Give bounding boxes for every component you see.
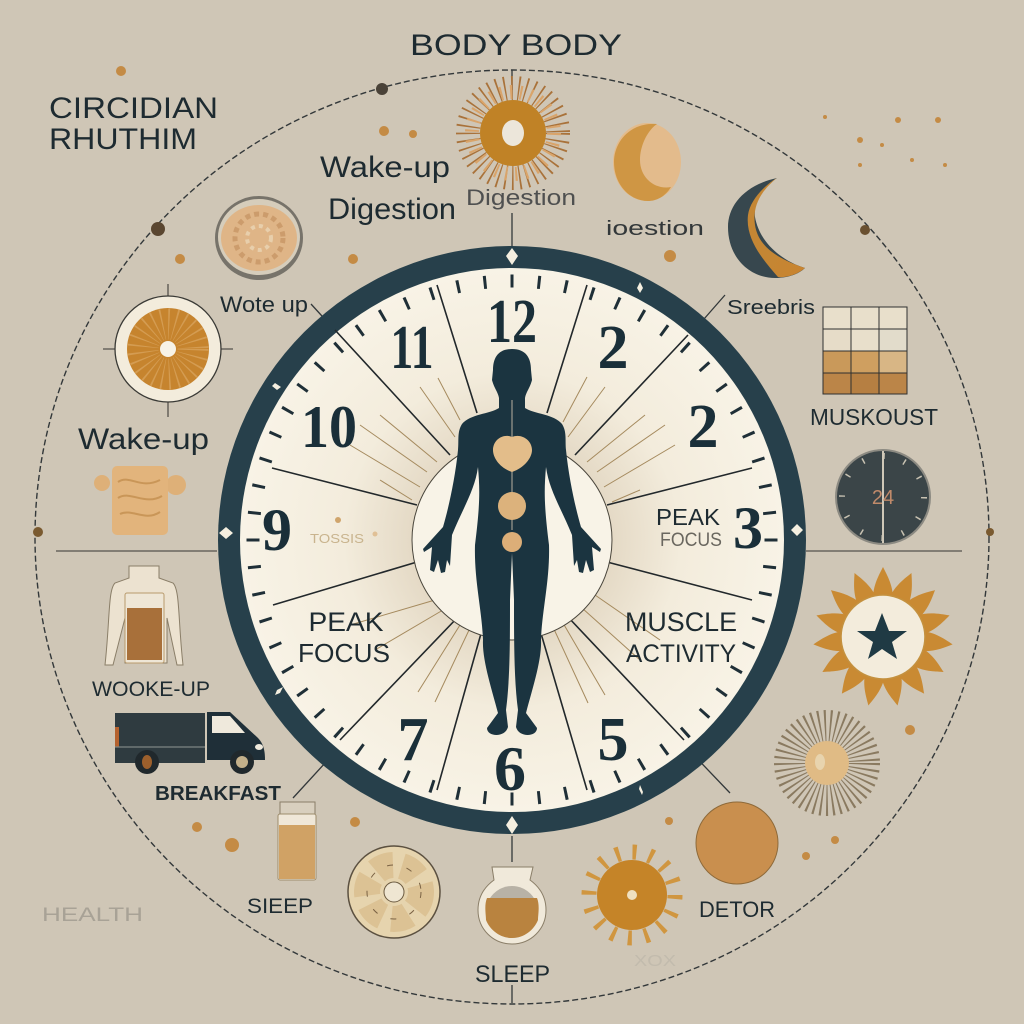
label: breakfast: BREAKFAST (155, 783, 281, 805)
icon: wall clock (836, 450, 930, 544)
clock radial lines (272, 285, 752, 790)
decorative dots (116, 66, 947, 860)
icon: seed slice (348, 846, 440, 938)
label: wake-up: Wake-up (78, 423, 209, 456)
text: wake-up digestion (320, 151, 456, 226)
clock labels: PEAK (308, 607, 384, 637)
clock labels: PEAK (656, 504, 721, 530)
text: wake-up digestion: Digestion (328, 193, 456, 226)
clock numerals: 2 (598, 314, 628, 382)
text: digestion small: Digestion (466, 185, 576, 210)
icon: orange disc (696, 802, 778, 884)
label: sleep: SLEEP (475, 961, 550, 988)
title: BODY BODY (410, 29, 622, 62)
icon: citrus wheel (103, 284, 233, 417)
clock labels: MUSCLE (625, 607, 737, 637)
clock numerals: 2 (688, 393, 718, 461)
clock numerals: 5 (598, 706, 628, 774)
clock labels (298, 504, 737, 668)
ring markers (219, 248, 803, 834)
label: health: HEALTH (42, 905, 143, 926)
clock numerals: 7 (398, 706, 428, 774)
text: wake-up digestion: Wake-up (320, 151, 450, 184)
icon: crescent moon (728, 178, 805, 278)
clock numerals: 10 (301, 394, 357, 460)
clock numerals: 6 (494, 733, 526, 804)
inner circle (412, 440, 612, 640)
clock (218, 246, 806, 834)
human silhouette (423, 349, 601, 735)
heading: circadian rhythm (49, 92, 218, 156)
clock numerals: 11 (390, 314, 434, 382)
icon: moon sphere (613, 123, 681, 201)
icon: burst (790, 726, 864, 800)
heading: circadian rhythm: RHUTHIM (49, 123, 197, 156)
faded mark: xox: XOX (634, 953, 676, 970)
label: detor: DETOR (699, 897, 775, 922)
heading: circadian rhythm: CIRCIDIAN (49, 92, 218, 125)
icon: faded tablet (94, 466, 186, 535)
icon: delivery truck (115, 712, 265, 774)
icon: round flask (478, 867, 546, 944)
label: wooke-up: WOOKE-UP (92, 678, 210, 701)
label: wake up small: Wote up (220, 292, 308, 317)
clock labels: TOSSIS (310, 531, 364, 546)
icon: small sun (589, 852, 675, 938)
body organ markers (493, 400, 532, 552)
clock labels: ACTIVITY (626, 640, 736, 668)
icon: wall clock: 24 (872, 487, 894, 509)
clock labels: FOCUS (298, 638, 390, 668)
sun icon: top (468, 88, 558, 178)
clock labels: FOCUS (660, 530, 722, 551)
clock numerals: 12 (487, 288, 537, 356)
label: muskoust: MUSKOUST (810, 404, 938, 430)
clock fine tan lines (350, 377, 675, 703)
icon: colour grid (823, 307, 907, 394)
icon: star badge (812, 567, 954, 708)
icon: bowl (215, 196, 303, 280)
label: sleep small: SIEEP (247, 895, 313, 918)
clock numerals: 3 (733, 495, 763, 561)
clock numerals: 9 (262, 497, 292, 563)
icon: drink glass (278, 802, 316, 880)
label: streebris: Sreebris (727, 297, 815, 319)
clock numerals (262, 288, 763, 804)
text: igestion: ioestion (606, 218, 704, 240)
icon: jar shirt (105, 566, 183, 665)
clock tick marks (253, 281, 771, 799)
